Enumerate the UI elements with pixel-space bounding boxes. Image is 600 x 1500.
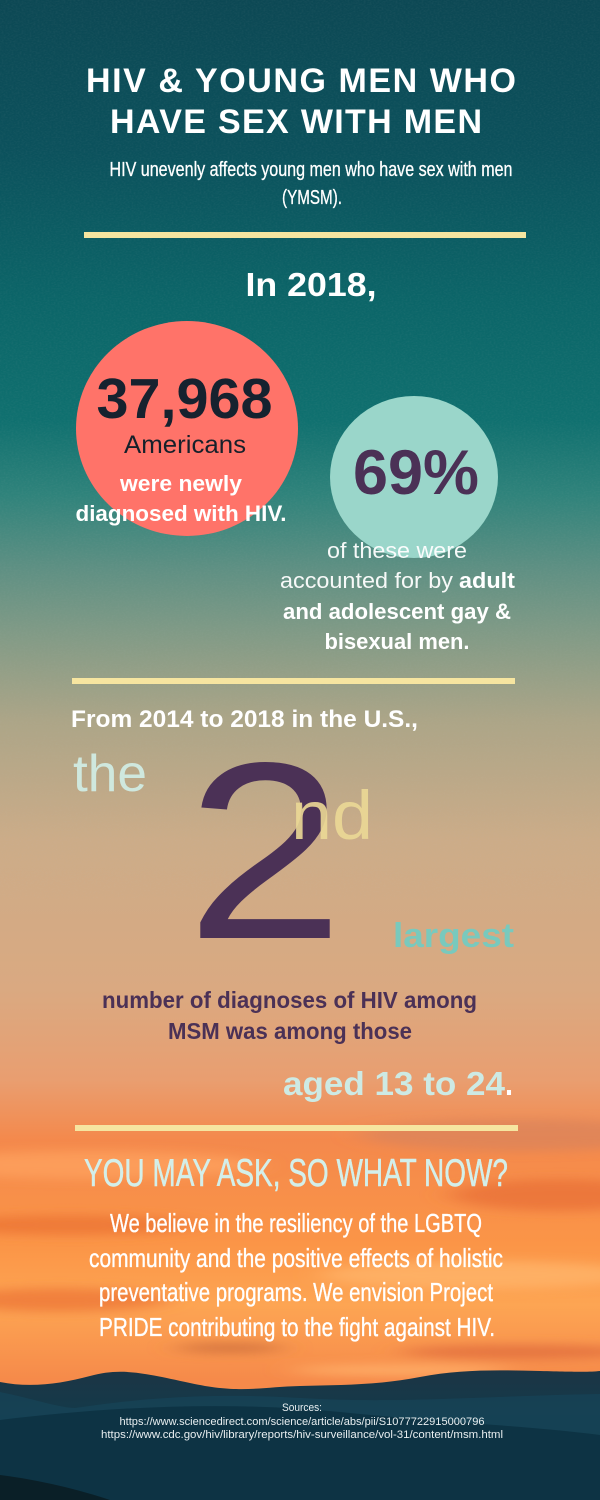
- sources: https://www.cdc.gov/hiv/library/reports/hiv-surveillance/vol-31/content/msm.html: [101, 1429, 503, 1441]
- heading: in 2018: In 2018,: [246, 266, 376, 303]
- hills: [0, 1370, 600, 1500]
- text: aged 13 to 24: .: [505, 1065, 513, 1102]
- intro text: [110, 159, 512, 209]
- text: share of gay and bisexual men: of these were: [327, 538, 467, 563]
- divider: [84, 232, 526, 238]
- word: largest: largest: [393, 917, 514, 955]
- panel: 69% circle: [330, 396, 498, 558]
- text: diagnoses among MSM: MSM was among those: [168, 1018, 412, 1044]
- text: diagnoses among MSM: number of diagnoses of HIV among: [102, 987, 477, 1013]
- panel: 37,968 circle: [76, 321, 298, 536]
- body text: community and the positive effects of holistic: [89, 1243, 503, 1273]
- ordinal: nd: nd: [291, 777, 373, 854]
- intro text: (YMSM).: [282, 187, 342, 209]
- body text: We believe in the resiliency of the LGBTQ: [110, 1208, 482, 1238]
- text: share of gay and bisexual men: [280, 538, 516, 654]
- body text: [89, 1208, 503, 1342]
- sources: https://www.sciencedirect.com/science/article/abs/pii/S1077722915000796: [120, 1416, 484, 1428]
- panel: 37,968 circle: diagnosed with HIV.: [76, 501, 286, 526]
- title: HIV & YOUNG MEN WHO: [86, 62, 516, 100]
- text: diagnoses among MSM: [102, 987, 477, 1044]
- word: the: the: [73, 745, 147, 803]
- body text: preventative programs. We envision Project: [99, 1277, 494, 1307]
- divider: [75, 1125, 518, 1131]
- title: [86, 62, 516, 141]
- divider: [72, 678, 515, 684]
- heading: from 2014 to 2018: From 2014 to 2018 in the U.S.,: [71, 706, 418, 733]
- panel: 37,968 circle: 37,968: [96, 367, 272, 431]
- intro text: HIV unevenly affects young men who have sex with men: [110, 159, 512, 181]
- title: HAVE SEX WITH MEN: [110, 103, 482, 141]
- text: share of gay and bisexual men: accounted for by: [280, 568, 453, 593]
- numeral: 2: 2: [186, 711, 344, 992]
- panel: 37,968 circle: were newly: [119, 471, 243, 496]
- text: share of gay and bisexual men: adult: [459, 568, 516, 593]
- text: aged 13 to 24: aged 13 to 24: [283, 1065, 506, 1102]
- sources: Sources:: [282, 1402, 322, 1414]
- text: share of gay and bisexual men: bisexual men.: [324, 629, 470, 654]
- panel: 37,968 circle: Americans: [124, 431, 246, 459]
- text: share of gay and bisexual men: and adolescent gay &: [283, 599, 511, 624]
- sources: [101, 1402, 503, 1441]
- panel: 69% circle: 69%: [353, 438, 479, 508]
- body text: PRIDE contributing to the fight against HIV.: [99, 1312, 495, 1342]
